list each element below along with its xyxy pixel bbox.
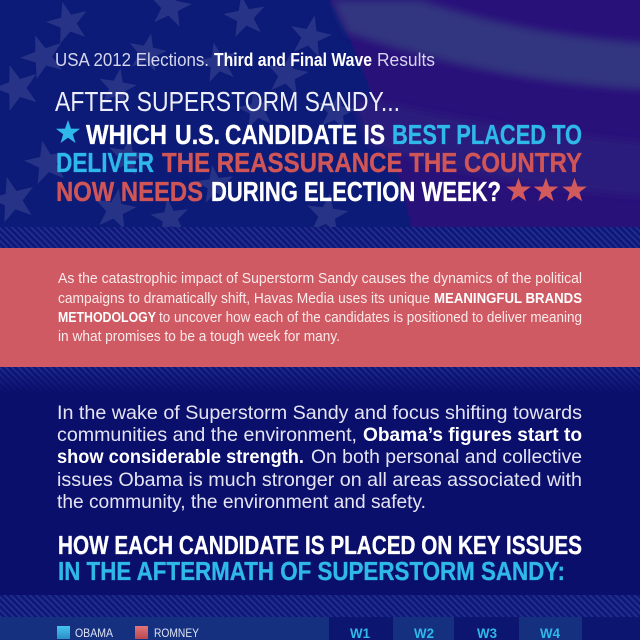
text block: body paragraph: Obama’s figures start to [363, 425, 582, 446]
text block: body paragraph: On both personal and collective [311, 447, 582, 468]
text block: body paragraph: communities and the environment, [57, 425, 357, 446]
legend: Obama [57, 626, 113, 640]
main question heading: CANDIDATE IS [225, 119, 385, 150]
subtitle: wave results: Third and Final Wave [214, 50, 372, 70]
legend: Romney: ROMNEY [154, 628, 199, 640]
text block: body paragraph: the community, the environment and safety. [57, 492, 426, 513]
main question heading: DURING ELECTION WEEK? [211, 176, 501, 207]
main question heading: WHICH [86, 119, 167, 150]
main question heading: DELIVER [56, 147, 154, 178]
heading: key issues [58, 532, 582, 586]
main question heading: BEST PLACED TO [392, 119, 582, 150]
flag background with stars and stripes [0, 0, 640, 237]
hatched band above table [0, 595, 640, 617]
main question heading [56, 119, 582, 207]
week labels [350, 625, 560, 640]
main question heading: NOW NEEDS [56, 176, 203, 207]
panel: intro: to uncover how each of the candidates is positioned to deliver meaning [159, 310, 582, 326]
main question heading: THE REASSURANCE THE COUNTRY [162, 147, 582, 178]
text block: body paragraph: In the wake of Superstorm Sandy and focus shifting towards [57, 403, 582, 424]
text block: body paragraph: issues Obama is much stronger on all areas associated with [57, 470, 582, 491]
icon: three red stars [506, 178, 587, 201]
table header [0, 617, 640, 640]
text block: body paragraph [57, 403, 582, 513]
title lead-in: AFTER SUPERSTORM SANDY... [55, 86, 400, 117]
heading: key issues: IN THE AFTERMATH OF SUPERSTORM SANDY: [58, 558, 565, 586]
subtitle: wave results [55, 50, 435, 70]
panel: intro: METHODOLOGY [58, 310, 156, 326]
subtitle: wave results: USA 2012 Elections. [55, 50, 209, 70]
panel: intro: MEANINGFUL BRANDS [434, 291, 582, 307]
hatched band above intro [0, 227, 640, 248]
panel: intro: in what promises to be a tough week for many. [58, 329, 340, 345]
panel: intro: campaigns to dramatically shift, Havas Media uses its unique [58, 291, 430, 307]
icon: blue star [56, 120, 80, 143]
panel: intro [0, 248, 640, 367]
text block: body paragraph: show considerable strength. [57, 447, 304, 468]
hatched band below intro [0, 367, 640, 386]
subtitle: wave results: Results [377, 50, 435, 70]
legend: Romney [135, 626, 199, 640]
legend: Obama: OBAMA [75, 628, 113, 640]
panel: intro: As the catastrophic impact of Superstorm Sandy causes the dynamics of the political [58, 271, 582, 287]
main question heading: U.S. [175, 119, 220, 150]
